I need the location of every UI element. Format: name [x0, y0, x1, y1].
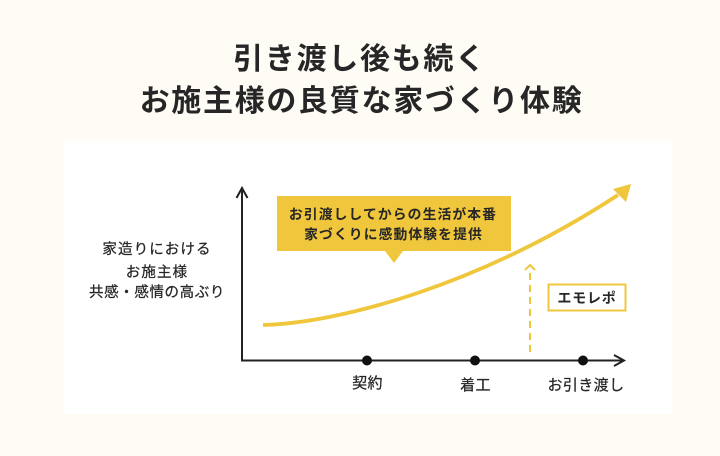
panel: chart background: [64, 141, 672, 414]
x axis arrow: [241, 355, 624, 366]
y-axis label: 家造りにおける: [102, 241, 212, 258]
icon: curve arrow head: [613, 184, 631, 202]
y axis arrow: [236, 188, 248, 361]
callout text: [289, 206, 497, 242]
timeline milestones: お引き渡し: [547, 377, 625, 394]
label: emorepo: エモレポ: [557, 290, 617, 306]
title: 引き渡し後も続く: [233, 43, 487, 76]
title: [140, 43, 583, 118]
y-axis label: お施主様: [126, 264, 188, 281]
timeline milestones: 契約: [352, 375, 383, 392]
callout: [277, 196, 511, 263]
growth curve: [263, 184, 631, 325]
timeline milestones: 着工: [460, 377, 491, 394]
callout text: 家づくりに感動体験を提供: [304, 226, 483, 242]
timeline milestones: [352, 356, 625, 394]
y-axis label: [89, 241, 225, 301]
y-axis label: 共感・感情の高ぶり: [89, 284, 225, 301]
label: emorepo: [548, 284, 626, 310]
title: お施主様の良質な家づくり体験: [140, 85, 583, 118]
dashed arrow: [525, 265, 535, 352]
callout text: お引渡ししてからの生活が本番: [289, 206, 497, 222]
